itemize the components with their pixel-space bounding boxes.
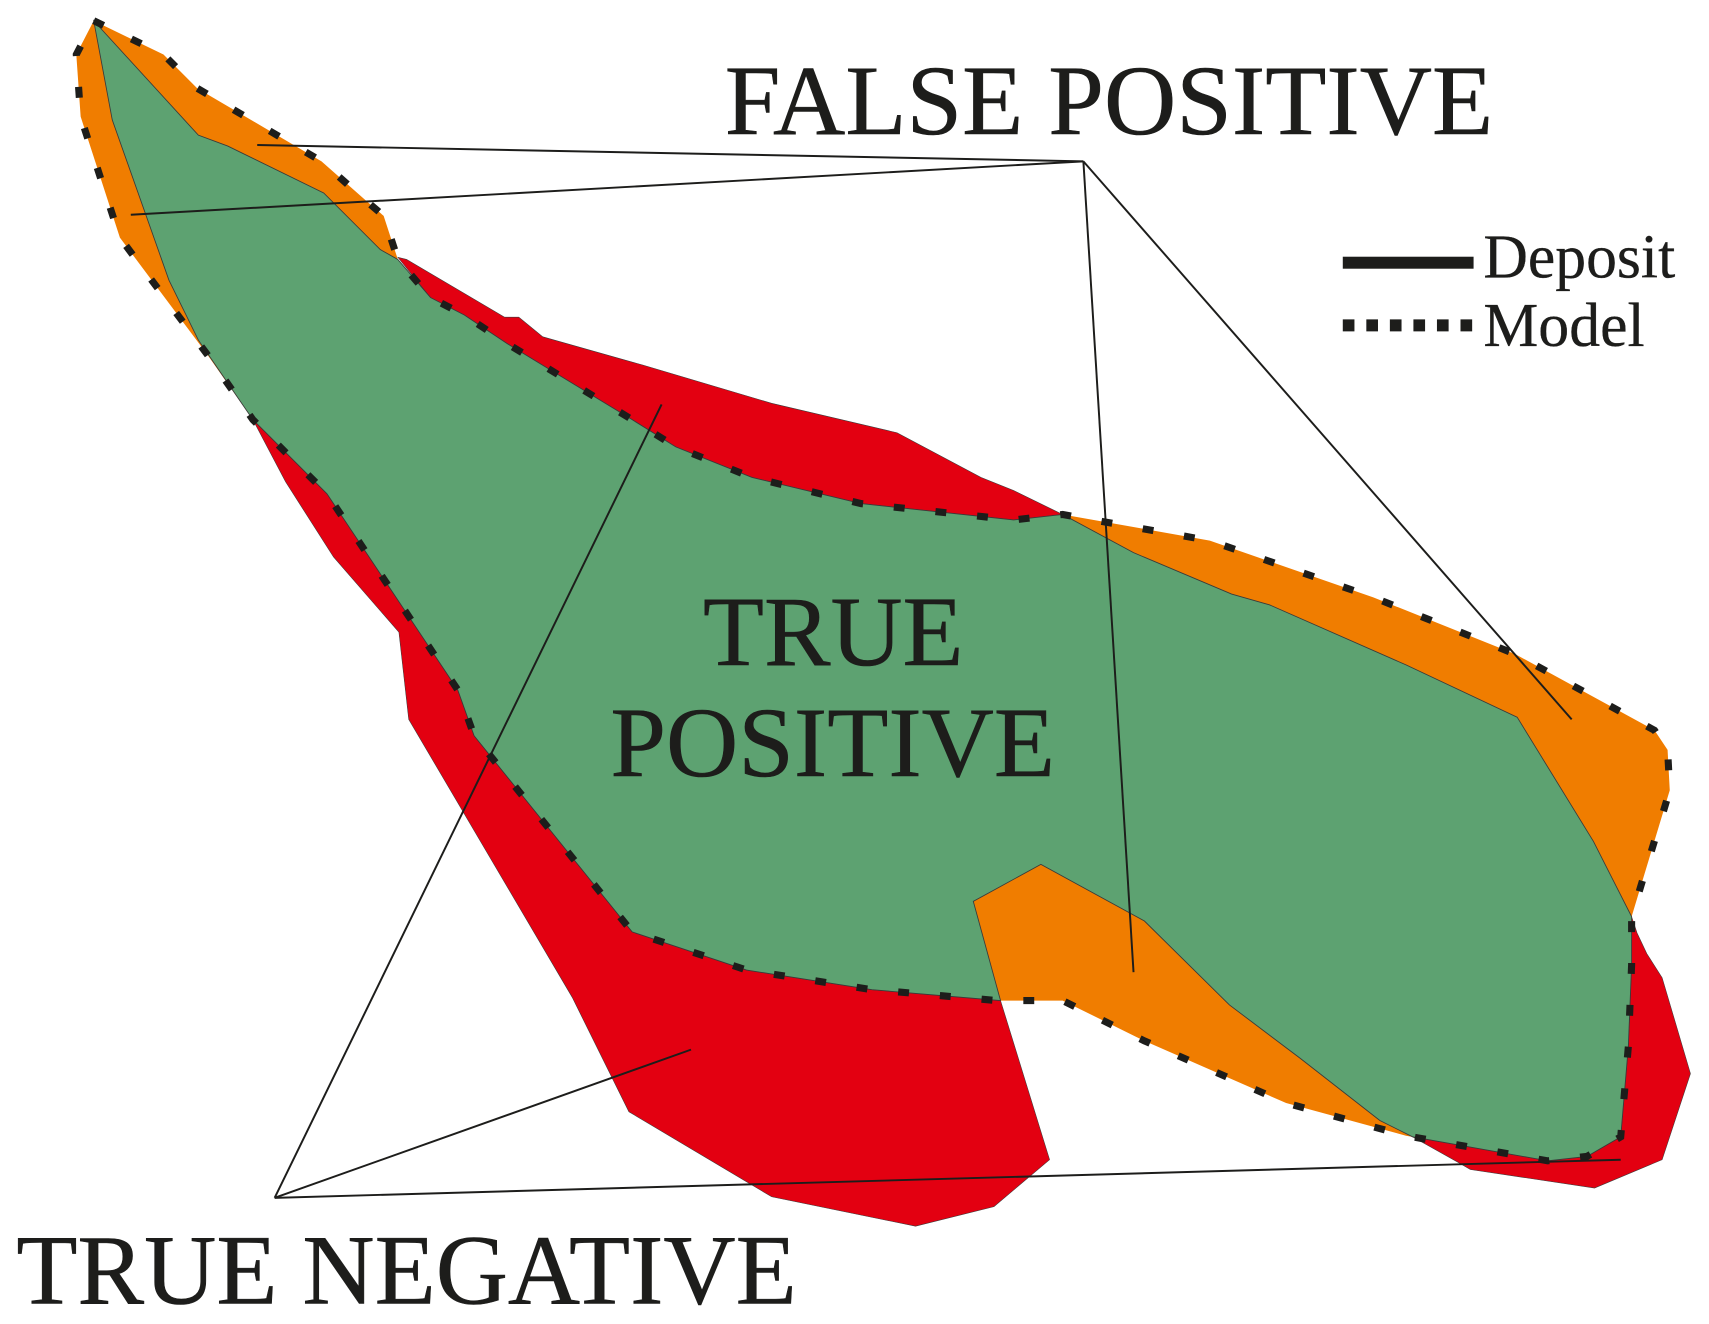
legend: model dotted line — [1343, 320, 1474, 331]
red area: lower right — [1413, 917, 1690, 1188]
label: true positive: TRUE — [703, 578, 963, 687]
legend: deposit solid line — [1343, 257, 1474, 269]
region: true positive (green overlap) — [94, 21, 1632, 1161]
legend: deposit label: Deposit — [1483, 223, 1675, 291]
region: true negative (red deposit areas) — [253, 257, 1690, 1226]
label: true negative: TRUE NEGATIVE — [16, 1217, 797, 1324]
leader lines: false positive — [131, 145, 1572, 972]
label: false positive: FALSE POSITIVE — [725, 47, 1493, 156]
legend: model label: Model — [1483, 292, 1645, 360]
leader lines: true negative — [275, 404, 1621, 1198]
legend — [1343, 223, 1675, 360]
label: true positive: POSITIVE — [610, 689, 1055, 798]
red area: lower left — [253, 420, 1050, 1226]
label: true positive — [610, 578, 1055, 798]
red area: upper — [398, 257, 1063, 520]
